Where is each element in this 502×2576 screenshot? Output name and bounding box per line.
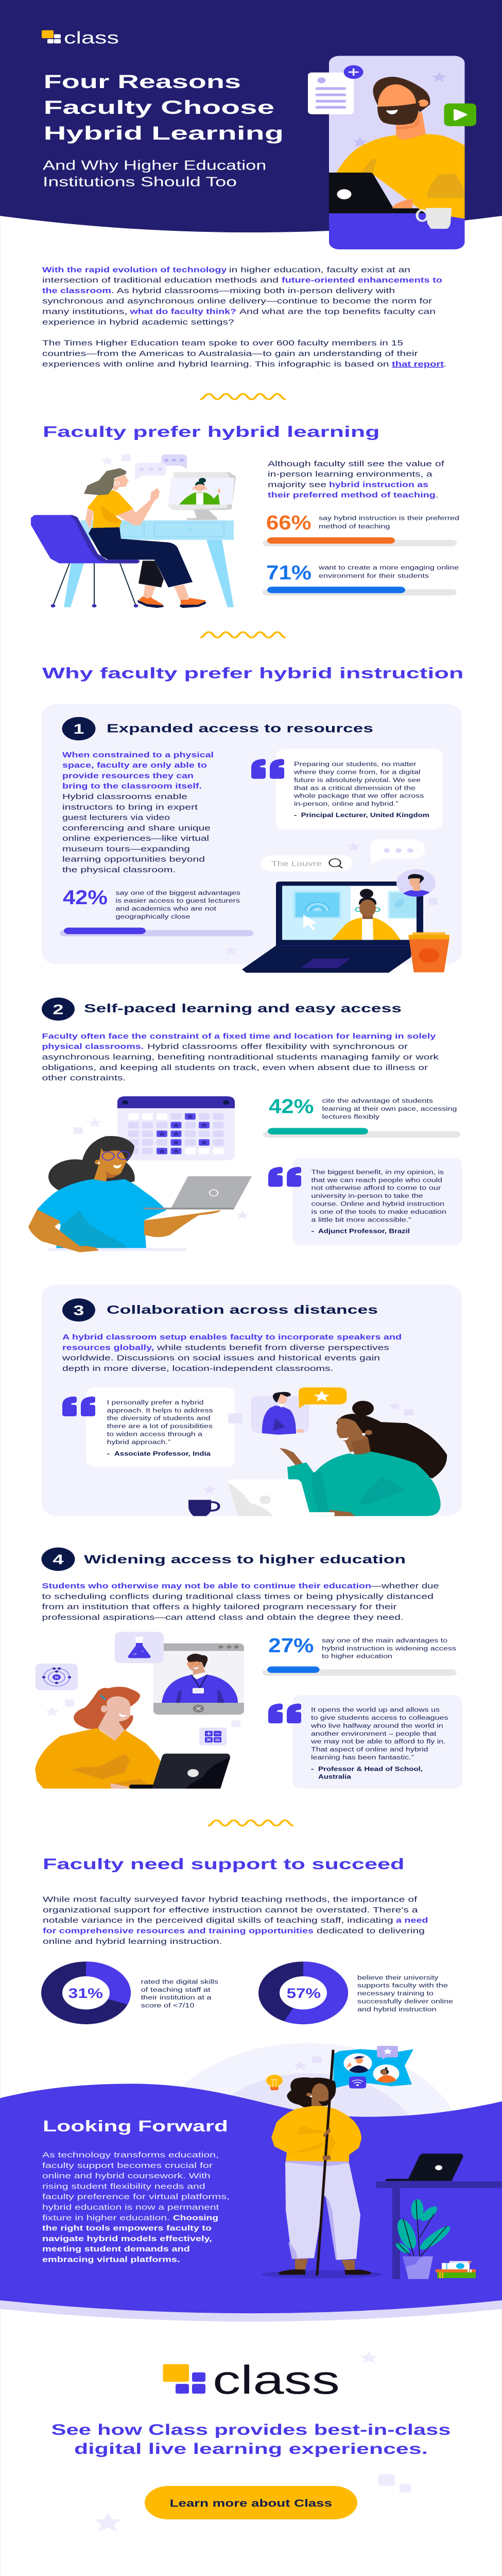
support paragraph: for comprehensive resources and training opportunities [43,1927,314,1935]
reason 2 body text: other constraints. [42,1074,126,1082]
stat: 42 percent own pace [263,1096,460,1138]
quote card: where they come from, for a digital [293,769,420,776]
icon: stack of books [436,2261,476,2278]
button: learn more: Learn more about Class [170,2498,332,2510]
quote card: It opens the world up and allows us [311,1707,440,1714]
illustration: virtual museum on laptop: The Louvre [271,859,322,868]
stat: 27 percent: to higher education [322,1653,392,1660]
donut chart: 57 percent: 57% [287,1986,321,2001]
donut chart: 31 percent: 31% [68,1986,103,2001]
reason 2 body text: Faculty often face the constraint of a fixed time and location for learning in solely [42,1032,436,1040]
call to action heading: digital live learning experiences. [74,2440,428,2458]
intro paragraph: synchronous and asynchronous online delivery—continue to become the norm for [42,297,432,305]
stat: 27 percent: hybrid instruction is widening access [322,1646,456,1652]
reason 1 body text: guest lecturers via video [62,814,170,822]
quote card [268,1158,462,1245]
icon: mug [417,208,452,229]
reason 1 heading: Expanded access to resources [107,722,373,735]
support paragraph: dedicated to delivering [317,1927,425,1935]
quote card [62,1387,235,1467]
title: Faculty Choose [44,97,274,118]
support paragraph: online and hybrid learning instruction. [43,1937,222,1945]
badge: number 4 [41,1548,75,1571]
stat: 27 percent: say one of the main advantages to [322,1637,447,1644]
reason 3 body text: depth in more diverse, location-independent classrooms. [62,1364,333,1372]
quote card: Principal Lecturer, United Kingdom [301,812,429,819]
quote card: learning has been fantastic.” [311,1754,414,1761]
quote card: not otherwise afford to come to our [311,1185,441,1192]
looking forward section [0,2043,502,2321]
quote card: to widen access through a [107,1431,202,1438]
stat: 71 percent [263,562,459,596]
reason 4 [35,1548,462,1789]
button: learn more [145,2486,357,2519]
support paragraph: notable variance in the perceived digital skills of teaching staff, indicating [43,1916,393,1924]
quote card: there are a lot of possibilities [107,1423,213,1430]
quote card: in-person, online and hybrid.” [294,801,399,807]
stat: 27 percent: 27% [268,1635,314,1657]
looking forward text: Choosing [173,2213,218,2222]
call to action heading [51,2421,451,2458]
reason 3 body text: worldwide. Discussions on social issues and historical events gain [62,1354,380,1362]
intro paragraph: in higher education, faculty exist at an [229,266,410,274]
illustration: woman holding flag [262,2046,502,2279]
quote card: who live halfway around the world in [310,1723,443,1730]
stat: 42 percent own pace: lectures flexibly [322,1114,380,1121]
call to action heading: See how Class provides best-in-class [51,2421,451,2438]
quote card: - [107,1451,110,1458]
stat: 66 percent: method of teaching [319,523,390,530]
stat: 42 percent guest lecturers: is easier access to guest lecturers [115,898,240,904]
quote card: we may not be able to afford to fly in. [310,1738,446,1745]
looking forward text: online and hybrid coursework. With [42,2172,211,2180]
icon: atom [36,1664,78,1690]
reason 4 body text: professional aspirations—can attend class and obtain the degree they need. [42,1613,404,1621]
badge: number 3 [62,1298,95,1321]
illustration: woman on video call [31,454,236,608]
looking forward text: faculty preference for virtual platforms, [42,2193,230,2201]
text: hybrid preferred: in-person learning environments, a [268,470,432,478]
intro paragraph: many institutions, [42,308,128,316]
logo: class white: class [64,28,119,47]
subtitle: And Why Higher Education [43,158,266,173]
quote card: to give students access to colleagues [311,1715,448,1721]
illustration: woman attending online class [35,1632,244,1789]
stat: 66 percent [263,512,459,546]
reason 1 body text: online experiences—like virtual [62,834,209,842]
stat: 71 percent: want to create a more engaging online [318,565,459,571]
reason 2 [28,997,462,1252]
intro paragraph: . As hybrid classrooms—mixing both in-person delivery with [111,286,395,295]
intro paragraph: what do faculty think? [129,308,236,316]
subtitle: Institutions Should Too [43,174,237,189]
panel: reason 1 [42,704,462,973]
looking forward text: the right tools empowers faculty to [42,2224,212,2232]
reason 4 body text: to scheduling conflicts during traditional class times or being physically distanced [42,1592,434,1601]
badge: number 2 [42,997,75,1021]
stat: 71 percent: environment for their students [319,573,429,580]
reason 4 body text: —whether due [371,1582,439,1590]
donut chart: 31 percent: their institution at a [141,1994,212,2001]
looking forward text: embracing virtual platforms. [42,2255,180,2264]
icon: calculator [199,1727,227,1745]
quote card: is one of the tools to make education [311,1209,446,1215]
stat: 42 percent own pace: 42% [269,1096,314,1118]
text: hybrid preferred: hybrid instruction as [329,480,428,489]
reason 1 body text: provide resources they can [62,771,194,780]
looking forward text: rising student flexibility needs and [42,2182,205,2191]
reason 3 body text: A hybrid classroom setup enables faculty to incorporate speakers and [62,1333,402,1341]
reason 2 heading: Self-paced learning and easy access [84,1002,402,1015]
reason 4 body text: Students who otherwise may not be able to continue their education [42,1582,371,1590]
support paragraph: organizational support for effective instruction cannot be overstated. There's a [43,1906,418,1914]
reason 1 body text: conferencing and share unique [62,824,211,832]
intro paragraph: . [444,360,447,368]
reason 1 body text: the physical classroom. [62,866,176,874]
quote card: That aspect of online and hybrid [311,1747,428,1753]
quote card: whole package that we offer across [293,793,424,800]
quote card: Australia [318,1774,351,1781]
quote card: the diversity of students and [107,1415,211,1422]
stat: 42 percent own pace: learning at their own pace, accessing [322,1106,457,1112]
subtitle [43,158,266,189]
heading: looking forward: Looking Forward [43,2117,228,2135]
text: hybrid preferred: their preferred method of teaching [268,491,436,499]
intro paragraph: experiences with online and hybrid learning. This infographic is based on [42,360,389,368]
looking forward text [42,2151,230,2264]
quote card: Adjunct Professor, Brazil [318,1228,410,1235]
text: hybrid preferred: majority see [268,480,326,489]
quote card: future is absolutely pivotal. We see [294,777,421,784]
illustration: woman on video chat [188,1387,447,1516]
text: hybrid preferred: Although faculty still see the value of [268,460,444,468]
stat: 42 percent guest lecturers: say one of the biggest advantages [115,890,240,896]
reason 3 body text: resources globally, [62,1343,154,1352]
heading: why faculty prefer hybrid instruction: Why faculty prefer hybrid instruction [42,665,463,682]
support paragraph: While most faculty surveyed favor hybrid teaching methods, the importance of [43,1895,417,1904]
intro paragraph: that report [392,360,444,368]
reason 2 body text: physical classrooms. [42,1042,144,1050]
icon: flask [115,1632,164,1663]
reason 1 body text: space, faculty are only able to [62,761,207,769]
reason 1 body text: Hybrid classrooms enable [62,792,187,801]
heading: faculty need support: Faculty need support to succeed [43,1855,405,1872]
reason 2 body text: asynchronous learning, benefiting nontraditional students managing family or work [42,1053,439,1061]
quote card: I personally prefer a hybrid [107,1399,204,1406]
badge: number 2: 2 [53,1002,64,1017]
badge: number 1: 1 [73,721,84,737]
stat: 42 percent guest lecturers [60,887,253,936]
support paragraph [43,1895,428,1945]
donut chart: 31 percent: score of <7/10 [141,2003,195,2009]
stat: 27 percent [263,1635,457,1676]
icon: plus button [344,65,363,79]
quote card: - [294,812,297,819]
quote card [268,1695,462,1789]
icon: profile card [308,73,354,114]
quote card: Associate Professor, India [114,1451,211,1458]
illustration: calendar and woman with laptop [28,1096,252,1252]
intro paragraph: intersection of traditional education methods and [42,276,279,284]
reason 1 body text: museum tours—expanding [62,844,190,853]
intro paragraph: countries—from the Americas to Australasia—to gain an understanding of their [42,349,418,358]
panel: reason 3 [42,1284,462,1516]
quote card: Preparing our students, no matter [294,761,417,768]
squiggle divider [208,1820,293,1826]
quote card: - [311,1766,314,1773]
looking forward text: fixture in higher education. [42,2213,170,2222]
reason 1 body text [62,751,214,874]
illustration: virtual museum on laptop [224,839,449,973]
reason 4 body text [42,1582,439,1621]
looking forward text: hybrid education is now a permanent [42,2203,219,2211]
text: hybrid preferred [268,460,444,499]
reason 2 body text: Hybrid classrooms offer flexibility with synchronous or [147,1042,408,1050]
quote card: course. Online and hybrid instruction [311,1201,444,1208]
badge: number 4: 4 [53,1551,64,1567]
quote card: hybrid approach.” [107,1439,170,1446]
reason 2 body text: obligations, and keeping all students on track, even when absent due to illness or [42,1063,428,1072]
hero banner [0,0,502,249]
quote card: The biggest benefit, in my opinion, is [311,1169,444,1176]
intro paragraph: The Times Higher Education team spoke to over 600 faculty members in 15 [42,338,403,347]
intro paragraph: And what are the top benefits faculty can [239,308,436,316]
reason 3 body text [62,1333,402,1372]
reason 4 body text: from an institution that offers a highly tailored program necessary for their [42,1603,397,1611]
stat: 66 percent: say hybrid instruction is their preferred [319,515,459,522]
donut chart: 31 percent: of teaching staff at [141,1987,211,1993]
badge: number 1 [62,717,96,740]
text: hybrid preferred: . [436,491,439,499]
intro paragraph: future-oriented enhancements to [282,276,442,284]
stat: 42 percent own pace: cite the advantage of students [322,1098,433,1105]
quote card: - [311,1228,314,1235]
looking forward text: As technology transforms education, [42,2151,219,2159]
icon: play button [444,104,476,126]
looking forward text: meeting student demands and [42,2245,190,2253]
quote card: Professor & Head of School, [318,1766,423,1773]
quote card: approach. It helps to address [107,1408,213,1414]
reason 2 body text [42,1032,439,1082]
title [44,71,284,144]
quote card: a little bit more accessible.” [311,1217,411,1224]
donut chart: 57 percent: supports faculty with the [357,1982,448,1989]
donut chart: 57 percent [258,1961,453,2024]
quote card: that as a critical dimension of the [294,785,416,792]
quote card [251,749,443,829]
icon: atom: N [55,1676,59,1680]
reason 1 body text: When constrained to a physical [62,751,214,759]
intro paragraph [42,266,447,368]
badge: number 3: 3 [73,1302,84,1318]
quote card: another environment – people that [311,1731,437,1737]
logo: class dark: class [213,2358,340,2402]
stat: 42 percent guest lecturers: 42% [63,887,108,909]
title: Hybrid Learning [44,123,284,144]
hero illustration: teacher at laptop [308,56,476,249]
looking forward text: navigate hybrid models effectively, [42,2234,212,2243]
stat: 71 percent: 71% [266,562,311,584]
quote card: that we can reach people who could [311,1177,442,1184]
decorative stars and squares [94,2351,411,2532]
reason 1 body text: instructors to bring in expert [62,803,198,811]
donut chart: 31 percent [41,1961,218,2024]
quote card: university in-person to take the [311,1193,423,1199]
title: Four Reasons [44,71,241,92]
stat: 42 percent guest lecturers: and academics who are not [115,906,216,912]
donut chart: 57 percent: successfully deliver online [357,1998,453,2005]
donut chart: 57 percent: necessary training to [357,1990,434,1997]
heading: faculty prefer hybrid learning: Faculty prefer hybrid learning [43,423,380,440]
stat: 42 percent guest lecturers: geographically close [115,913,190,920]
reason 3 body text: while students benefit from diverse perspectives [157,1343,389,1352]
stat: 66 percent: 66% [266,512,311,534]
intro paragraph: experience in hybrid academic settings? [42,318,234,326]
support paragraph: a need [396,1916,428,1924]
intro paragraph: With the rapid evolution of technology [42,266,227,274]
icon: potted plant [393,2199,454,2279]
reason 1 body text: learning opportunities beyond [62,855,205,863]
reason 3 heading: Collaboration across distances [107,1303,378,1317]
squiggle divider [200,632,286,637]
squiggle divider [200,394,286,399]
reason 4 heading: Widening access to higher education [84,1553,406,1566]
donut chart: 31 percent: rated the digital skills [141,1979,218,1986]
donut chart: 57 percent: believe their university [357,1975,439,1981]
intro paragraph: the classroom [42,286,111,295]
looking forward text: faculty support becomes crucial for [42,2161,213,2170]
donut chart: 57 percent: and hybrid instruction [357,2006,437,2013]
reason 1 body text: bring to the classroom itself. [62,782,202,790]
